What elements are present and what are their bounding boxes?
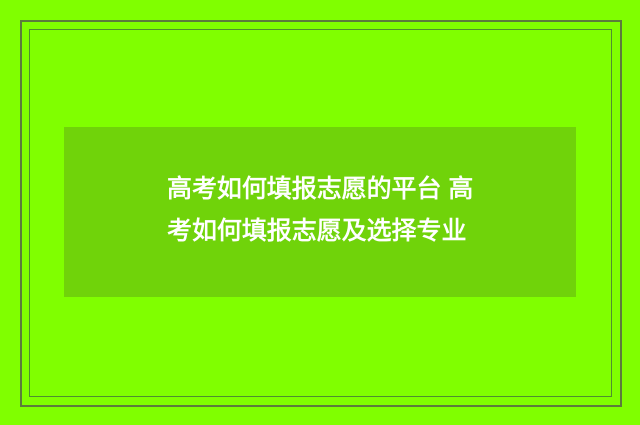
title line 1: 高考如何填报志愿的平台 高 — [167, 175, 473, 203]
title panel — [64, 127, 576, 297]
inner border frame — [29, 29, 612, 397]
title line 2: 考如何填报志愿及选择专业 — [167, 217, 466, 245]
